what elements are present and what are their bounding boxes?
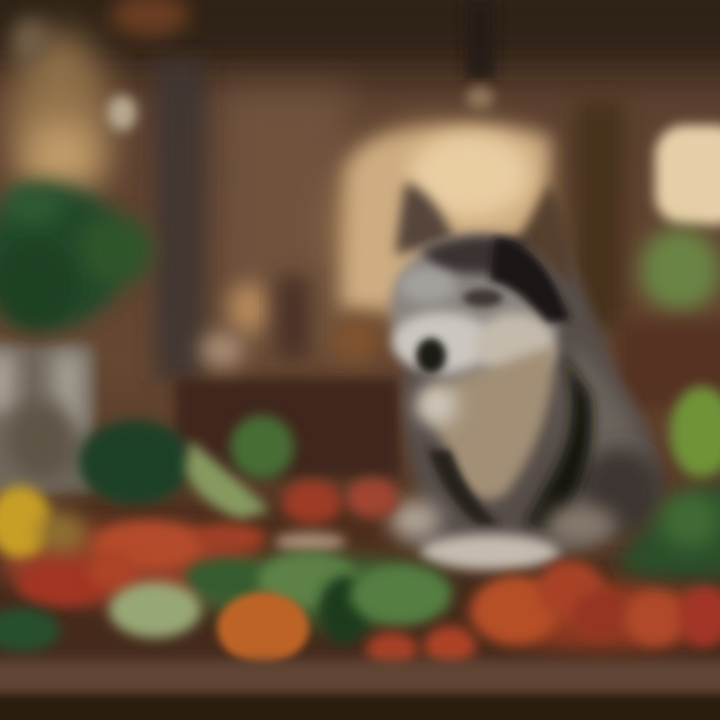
dark column right: [575, 100, 625, 330]
left window glow: [10, 18, 137, 210]
table base: [0, 565, 720, 665]
icon: tomatoes left: [18, 521, 266, 606]
dark back marking: [525, 350, 592, 530]
ears: [395, 182, 455, 255]
colour layers beneath the vegetables: [0, 525, 720, 650]
chest: [418, 345, 555, 500]
icon: squash and greens: [79, 415, 294, 520]
icon: greens right: [620, 386, 720, 579]
central window glow: [330, 0, 552, 325]
icon: green vegetables centre: [0, 552, 450, 652]
nose: [416, 338, 446, 374]
body: [400, 240, 660, 560]
head: [390, 235, 560, 385]
icon: tomatoes right: [366, 560, 720, 668]
wooden table edge: [0, 660, 720, 720]
husky dog: [390, 182, 662, 560]
vegetables on the table: [0, 386, 720, 668]
icon: yellow pepper: [0, 486, 52, 558]
muzzle: [392, 312, 492, 372]
broccoli and metal pot: [0, 185, 153, 495]
dark column left: [155, 60, 205, 380]
dog paws: [389, 500, 616, 570]
right window glow: [615, 125, 720, 410]
icon: tomatoes behind: [274, 478, 398, 552]
shelf with jars: [175, 275, 400, 478]
icon: orange tomato front: [217, 592, 309, 664]
